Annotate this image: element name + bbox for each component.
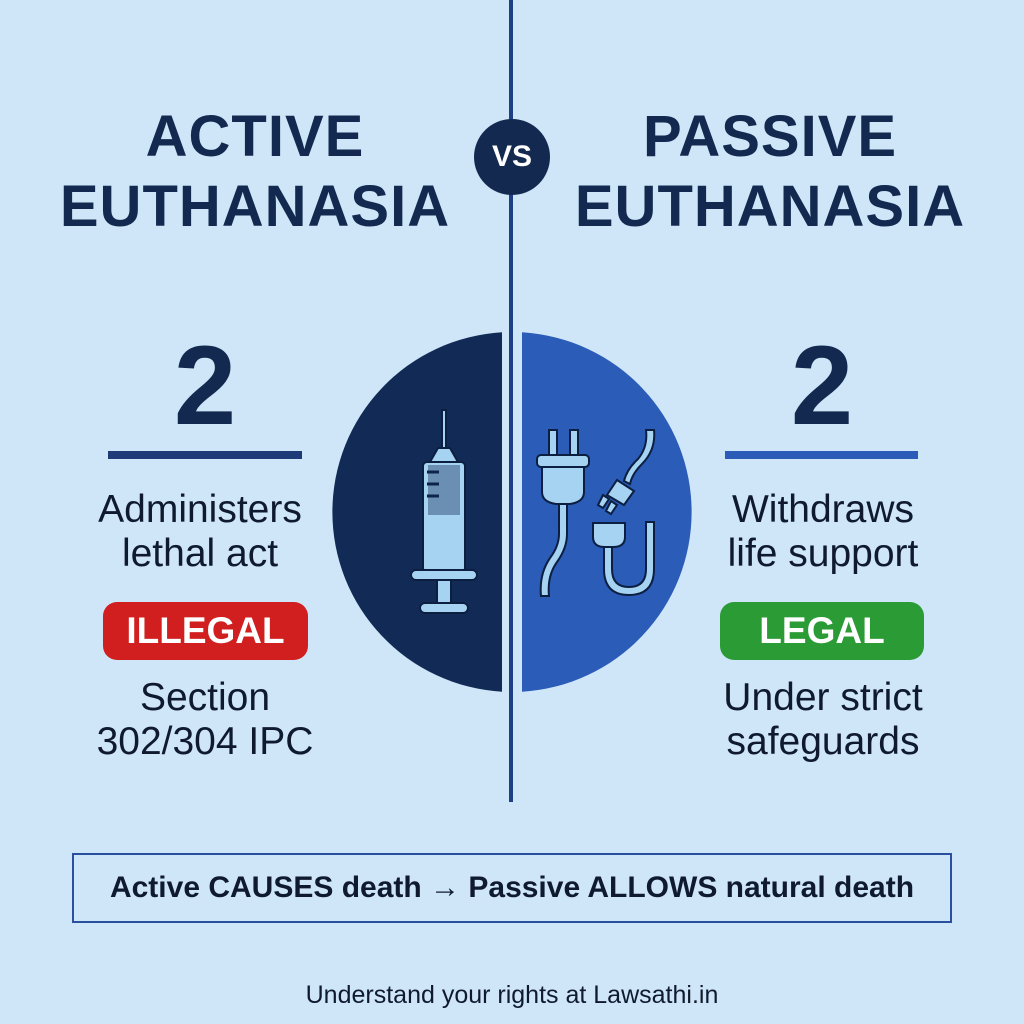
- badge: illegal: [103, 602, 308, 660]
- badge: legal: [720, 602, 924, 660]
- underline right: [725, 451, 918, 459]
- divider line: [509, 0, 513, 802]
- title: passive: EUTHANASIA: [575, 174, 965, 239]
- right half circle: [522, 332, 692, 692]
- text: administers: lethal act: [122, 532, 278, 575]
- title: active: EUTHANASIA: [60, 174, 450, 239]
- title: active: ACTIVE: [146, 104, 364, 169]
- icon: syringe: [411, 410, 477, 613]
- text: safeguards: safeguards: [727, 720, 919, 763]
- badge: illegal: ILLEGAL: [126, 610, 285, 651]
- text: withdraws: Withdraws: [732, 488, 914, 531]
- title: passive: [575, 104, 965, 239]
- text: administers: Administers: [98, 488, 302, 531]
- text: section: 302/304 IPC: [97, 720, 313, 763]
- title: active: [60, 104, 450, 239]
- summary box: Active CAUSES death → Passive ALLOWS natural death: [110, 871, 914, 904]
- summary box: [72, 853, 952, 923]
- number left: 2: [174, 323, 236, 448]
- icon: unplugged cable: [537, 430, 654, 596]
- underline left: [108, 451, 302, 459]
- title: passive: PASSIVE: [643, 104, 897, 169]
- text: section: [97, 676, 313, 763]
- text: withdraws: life support: [728, 532, 918, 575]
- text: withdraws: [728, 488, 918, 575]
- central circle icons: [332, 332, 692, 692]
- left half circle: [332, 332, 502, 692]
- text: safeguards: Under strict: [723, 676, 923, 719]
- badge: legal: LEGAL: [759, 610, 885, 651]
- text: safeguards: [723, 676, 923, 763]
- vs badge: VS: [492, 140, 532, 173]
- vs badge: [474, 119, 550, 195]
- footer: Understand your rights at Lawsathi.in: [306, 981, 718, 1009]
- number right: 2: [791, 323, 853, 448]
- text: section: Section: [140, 676, 270, 719]
- text: administers: [98, 488, 302, 575]
